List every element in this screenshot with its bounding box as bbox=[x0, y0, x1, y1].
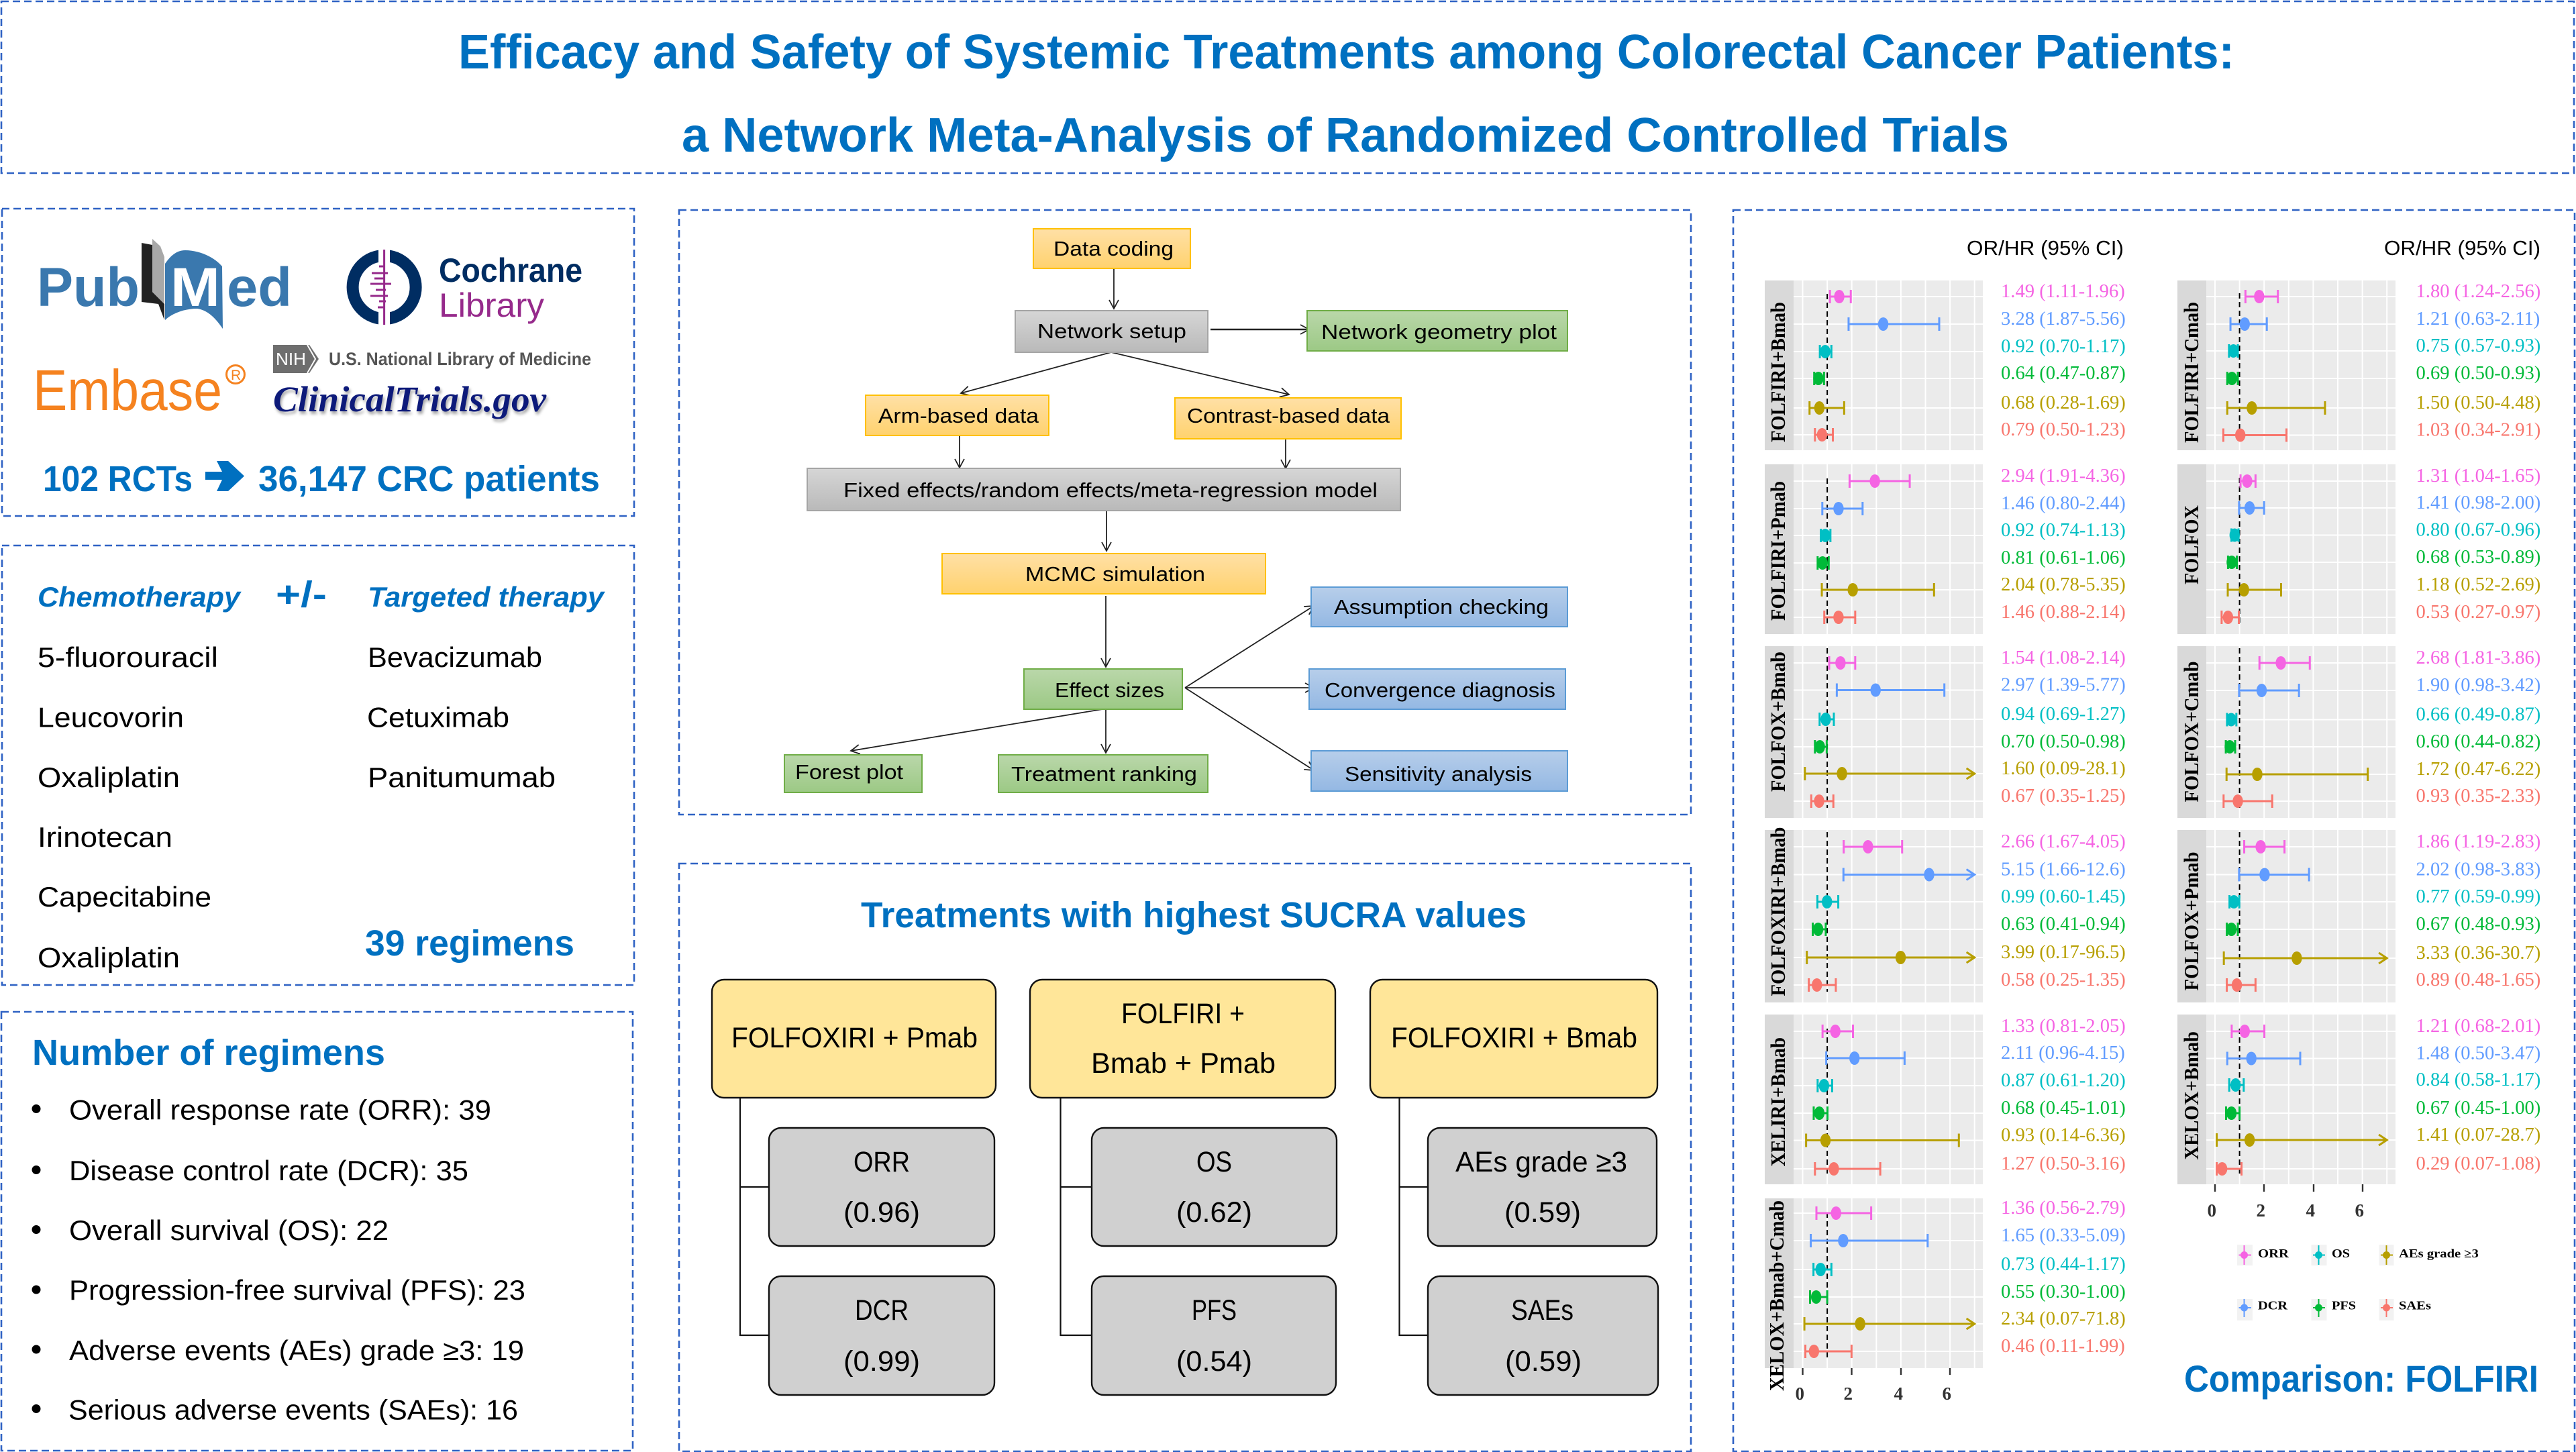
values: FOLFOX+Cmab: 0.60 (0.44-0.82) bbox=[2416, 731, 2540, 752]
values: XELIRI+Bmab: 0.93 (0.14-6.36) bbox=[2001, 1125, 2126, 1146]
box: OS: OS bbox=[1196, 1146, 1232, 1178]
box: MCMC simulation bbox=[942, 554, 1266, 594]
axis: left column: 6 bbox=[1942, 1384, 1951, 1404]
box: ORR: ORR bbox=[854, 1146, 910, 1178]
chart: XELOX+Bmab bbox=[2206, 1015, 2395, 1184]
axis: right column: 0 bbox=[2208, 1200, 2216, 1221]
values: XELOX+Bmab: 0.67 (0.45-1.00) bbox=[2416, 1098, 2540, 1119]
box: sensitivity analysis bbox=[1311, 751, 1567, 791]
forest panel: FOLFOX bbox=[2177, 464, 2540, 634]
axis: left column: 0 bbox=[1796, 1384, 1804, 1404]
forest panel: FOLFOXIRI+Bmab bbox=[1765, 827, 2126, 1002]
values: FOLFOX+Bmab: 1.60 (0.09-28.1) bbox=[2001, 758, 2126, 779]
list: regimen counts bbox=[32, 1094, 525, 1425]
forest panel: XELOX+Bmab bbox=[2177, 1015, 2540, 1221]
values: XELOX+Bmab+Cmab: 0.55 (0.30-1.00) bbox=[2001, 1282, 2126, 1302]
column header: right: OR/HR (95% CI) bbox=[2384, 236, 2540, 260]
values: FOLFIRI+Cmab: 0.69 (0.50-0.93) bbox=[2416, 363, 2540, 384]
logo: PubMed: Pub bbox=[37, 257, 140, 318]
title bbox=[1, 1, 2574, 173]
box: assumption checking: Assumption checking bbox=[1334, 595, 1549, 619]
list: regimen counts: Disease control rate (DCR): 35 bbox=[69, 1155, 468, 1186]
values: FOLFIRI+Pmab: 0.81 (0.61-1.06) bbox=[2001, 548, 2126, 568]
forest panel: FOLFIRI+Bmab: FOLFIRI+Bmab bbox=[1766, 302, 1790, 442]
chart: FOLFOX bbox=[2206, 464, 2395, 634]
box: SAEs: SAEs bbox=[1511, 1294, 1574, 1327]
values: FOLFOX+Cmab: 2.68 (1.81-3.86) bbox=[2416, 647, 2540, 668]
values: XELOX+Bmab: 1.21 (0.68-2.01) bbox=[2416, 1016, 2540, 1037]
box: arm-based data bbox=[866, 395, 1049, 435]
text: 102 RCTs: 102 RCTs bbox=[43, 459, 193, 499]
chart: FOLFIRI+Pmab bbox=[1794, 464, 1983, 634]
logo: Cochrane Library: Cochrane bbox=[439, 252, 582, 289]
list: targeted drugs: Panitumumab bbox=[368, 762, 556, 793]
box: AEs grade 3: AEs grade ≥3 bbox=[1455, 1146, 1627, 1178]
forest panel: XELIRI+Bmab: XELIRI+Bmab bbox=[1766, 1037, 1790, 1166]
values: FOLFOX+Cmab: 0.66 (0.49-0.87) bbox=[2416, 705, 2540, 725]
list: regimen counts: Adverse events (AEs) grade ≥3: 19 bbox=[69, 1335, 524, 1366]
values: FOLFIRI+Cmab: 1.21 (0.63-2.11) bbox=[2416, 309, 2540, 329]
box: convergence diagnosis: Convergence diagnosis bbox=[1325, 678, 1555, 702]
box: network setup bbox=[1015, 311, 1208, 352]
legend item: ORR: ORR bbox=[2258, 1247, 2289, 1260]
forest panel: FOLFIRI+Cmab: FOLFIRI+Cmab bbox=[2179, 302, 2203, 443]
values: FOLFIRI+Bmab: 3.28 (1.87-5.56) bbox=[2001, 309, 2126, 329]
box: PFS: PFS bbox=[1192, 1294, 1237, 1327]
forest panel: FOLFOXIRI+Bmab: FOLFOXIRI+Bmab bbox=[1766, 827, 1790, 996]
axis: right column: 4 bbox=[2306, 1200, 2315, 1221]
box: PFS bbox=[1092, 1276, 1336, 1395]
text: Comparison FOLFIRI: Comparison: FOLFIRI bbox=[2184, 1357, 2538, 1400]
box: network setup: Network setup bbox=[1037, 319, 1186, 343]
forest panel: FOLFOX+Pmab: FOLFOX+Pmab bbox=[2179, 852, 2203, 990]
box: FOLFOXIRI + Bmab bbox=[1370, 980, 1657, 1098]
box: ORR: (0.96) bbox=[843, 1196, 920, 1229]
axis: left column bbox=[1796, 1368, 1951, 1404]
logo: NIH U.S. National Library of Medicine: NIH bbox=[276, 349, 306, 369]
chart: FOLFIRI+Cmab bbox=[2206, 280, 2395, 450]
box: data coding: Data coding bbox=[1053, 237, 1174, 260]
connectors: tree lines bbox=[740, 1098, 1428, 1335]
title: Efficacy and Safety of Systemic Treatments among Colorectal Cancer Patients: bbox=[458, 25, 2234, 79]
values: FOLFOX+Bmab: 0.94 (0.69-1.27) bbox=[2001, 704, 2126, 725]
box: ORR bbox=[769, 1128, 994, 1246]
forest panel: FOLFOX: FOLFOX bbox=[2179, 505, 2203, 584]
values: XELIRI+Bmab: 0.87 (0.61-1.20) bbox=[2001, 1070, 2126, 1091]
heading: number of regimens: Number of regimens bbox=[32, 1033, 385, 1073]
list: chemotherapy drugs: Oxaliplatin bbox=[38, 942, 180, 973]
legend bbox=[2237, 1245, 2479, 1320]
values: FOLFOX bbox=[2416, 466, 2540, 623]
values: XELOX+Bmab+Cmab bbox=[2001, 1198, 2126, 1357]
values: FOLFOX+Cmab bbox=[2416, 647, 2540, 807]
legend item: DCR bbox=[2237, 1299, 2288, 1320]
box: SAEs bbox=[1428, 1276, 1658, 1395]
values: XELIRI+Bmab: 0.68 (0.45-1.01) bbox=[2001, 1098, 2126, 1119]
values: FOLFIRI+Cmab bbox=[2416, 281, 2540, 440]
box: convergence diagnosis bbox=[1309, 669, 1565, 709]
values: FOLFOX+Pmab bbox=[2416, 831, 2540, 990]
box: DCR bbox=[769, 1276, 994, 1395]
box: network geometry plot bbox=[1307, 311, 1567, 351]
values: XELIRI+Bmab: 1.33 (0.81-2.05) bbox=[2001, 1016, 2126, 1037]
values: FOLFIRI+Pmab: 2.94 (1.91-4.36) bbox=[2001, 466, 2126, 486]
legend item: PFS bbox=[2311, 1299, 2356, 1320]
values: FOLFIRI+Bmab: 0.79 (0.50-1.23) bbox=[2001, 419, 2126, 440]
values: FOLFIRI+Pmab: 0.92 (0.74-1.13) bbox=[2001, 520, 2126, 541]
values: FOLFOXIRI+Bmab: 5.15 (1.66-12.6) bbox=[2001, 859, 2126, 880]
box: DCR: DCR bbox=[855, 1294, 909, 1327]
values: FOLFIRI+Cmab: 1.80 (1.24-2.56) bbox=[2416, 281, 2540, 302]
box: FOLFOXIRI + Bmab: FOLFOXIRI + Bmab bbox=[1391, 1022, 1637, 1054]
forest panel: FOLFOX+Bmab bbox=[1765, 646, 2126, 818]
values: XELOX+Bmab: 1.41 (0.07-28.7) bbox=[2416, 1125, 2540, 1145]
values: FOLFOXIRI+Bmab: 0.63 (0.41-0.94) bbox=[2001, 914, 2126, 935]
forest panel: FOLFIRI+Pmab: FOLFIRI+Pmab bbox=[1766, 481, 1790, 621]
column header: left: OR/HR (95% CI) bbox=[1967, 236, 2124, 260]
values: FOLFOX+Bmab: 0.67 (0.35-1.25) bbox=[2001, 786, 2126, 807]
values: FOLFOX+Cmab: 1.90 (0.98-3.42) bbox=[2416, 675, 2540, 696]
values: XELIRI+Bmab: 1.27 (0.50-3.16) bbox=[2001, 1153, 2126, 1174]
box: assumption checking bbox=[1311, 587, 1567, 627]
values: FOLFOX+Cmab: 1.72 (0.47-6.22) bbox=[2416, 759, 2540, 780]
logo: PubMed bbox=[37, 239, 292, 329]
values: FOLFIRI+Pmab bbox=[2001, 466, 2126, 623]
box: treatment ranking: Treatment ranking bbox=[1011, 762, 1197, 786]
list: targeted drugs: Cetuximab bbox=[367, 702, 509, 733]
values: FOLFIRI+Cmab: 1.50 (0.50-4.48) bbox=[2416, 393, 2540, 413]
values: XELOX+Bmab+Cmab: 2.34 (0.07-71.8) bbox=[2001, 1308, 2126, 1329]
chart: FOLFOXIRI+Bmab bbox=[1794, 830, 1983, 1002]
panel: highest SUCRA values bbox=[679, 864, 1691, 1451]
list: chemotherapy drugs: 5-fluorouracil bbox=[38, 641, 218, 673]
box: contrast-based data bbox=[1175, 398, 1401, 439]
values: XELOX+Bmab bbox=[2416, 1016, 2540, 1174]
values: FOLFOX+Cmab: 0.93 (0.35-2.33) bbox=[2416, 786, 2540, 807]
values: FOLFOX+Pmab: 0.67 (0.48-0.93) bbox=[2416, 914, 2540, 935]
logo: PubMed: ed bbox=[227, 257, 292, 318]
logo: ClinicalTrials.gov: ClinicalTrials.gov bbox=[273, 379, 547, 419]
values: FOLFOXIRI+Bmab: 0.99 (0.60-1.45) bbox=[2001, 886, 2126, 907]
panel: number of regimens bbox=[1, 1012, 633, 1451]
forest panel: XELOX+Bmab: XELOX+Bmab bbox=[2179, 1031, 2203, 1159]
values: FOLFOX: 1.18 (0.52-2.69) bbox=[2416, 574, 2540, 595]
values: FOLFOXIRI+Bmab: 3.99 (0.17-96.5) bbox=[2001, 942, 2126, 963]
logo: PubMed: M bbox=[170, 257, 220, 318]
legend item: DCR: DCR bbox=[2258, 1299, 2288, 1312]
panel: analysis flowchart bbox=[679, 210, 1691, 815]
values: FOLFOX+Bmab: 2.97 (1.39-5.77) bbox=[2001, 675, 2126, 695]
heading: plus/minus: +/- bbox=[276, 574, 327, 615]
box: forest plot: Forest plot bbox=[795, 760, 903, 784]
chart: FOLFIRI+Bmab bbox=[1794, 280, 1983, 450]
values: FOLFOX+Bmab: 0.70 (0.50-0.98) bbox=[2001, 731, 2126, 752]
box: data coding bbox=[1033, 229, 1190, 268]
list: regimen counts: Overall survival (OS): 22 bbox=[69, 1214, 389, 1246]
arrows: flowchart connectors bbox=[851, 268, 1314, 770]
heading: SUCRA: Treatments with highest SUCRA values bbox=[861, 895, 1527, 935]
values: FOLFOX+Bmab bbox=[2001, 647, 2126, 807]
forest panel: FOLFIRI+Cmab bbox=[2177, 280, 2540, 450]
arrow: RCTs to patients bbox=[205, 461, 244, 491]
box: AEs grade 3: (0.59) bbox=[1504, 1196, 1581, 1229]
legend item: AEs grade 3 bbox=[2379, 1245, 2479, 1265]
chart: FOLFOX+Cmab bbox=[2206, 646, 2395, 818]
values: FOLFOX: 0.53 (0.27-0.97) bbox=[2416, 602, 2540, 623]
box: FOLFIRI + Bmab + Pmab bbox=[1030, 980, 1335, 1098]
axis: right column: 2 bbox=[2256, 1200, 2265, 1221]
box: OS bbox=[1092, 1128, 1337, 1246]
forest panel: FOLFOX+Pmab bbox=[2177, 830, 2540, 1002]
forest panel: FOLFIRI+Bmab bbox=[1765, 280, 2126, 450]
values: XELIRI+Bmab: 2.11 (0.96-4.15) bbox=[2001, 1043, 2125, 1064]
values: FOLFOX+Bmab: 1.54 (1.08-2.14) bbox=[2001, 647, 2126, 668]
box: FOLFOXIRI + Pmab bbox=[712, 980, 996, 1098]
values: XELOX+Bmab+Cmab: 0.73 (0.44-1.17) bbox=[2001, 1254, 2126, 1275]
box: FOLFIRI + Bmab + Pmab: Bmab + Pmab bbox=[1091, 1047, 1276, 1080]
box: sensitivity analysis: Sensitivity analysis bbox=[1345, 762, 1532, 786]
list: chemotherapy drugs: Irinotecan bbox=[38, 821, 172, 853]
axis: left column: 2 bbox=[1844, 1384, 1853, 1404]
legend item: OS: OS bbox=[2332, 1247, 2350, 1260]
values: FOLFOX+Pmab: 1.86 (1.19-2.83) bbox=[2416, 831, 2540, 852]
box: effect sizes bbox=[1024, 669, 1182, 709]
values: FOLFIRI+Bmab: 0.92 (0.70-1.17) bbox=[2001, 336, 2126, 357]
logo: Cochrane Library bbox=[353, 248, 582, 326]
box: contrast-based data: Contrast-based data bbox=[1187, 404, 1390, 427]
chart: XELOX+Bmab+Cmab bbox=[1794, 1198, 1983, 1368]
logo: Cochrane Library: Library bbox=[439, 287, 544, 324]
values: XELOX+Bmab+Cmab: 1.36 (0.56-2.79) bbox=[2001, 1198, 2126, 1218]
values: FOLFIRI+Bmab: 0.64 (0.47-0.87) bbox=[2001, 363, 2126, 384]
panel: forest plots comparison with FOLFIRI bbox=[1733, 210, 2575, 1451]
values: FOLFIRI+Bmab: 1.49 (1.11-1.96) bbox=[2001, 281, 2125, 302]
list: targeted drugs bbox=[367, 641, 556, 793]
box: model bbox=[807, 468, 1400, 511]
values: XELIRI+Bmab bbox=[2001, 1016, 2126, 1174]
values: FOLFOX+Pmab: 2.02 (0.98-3.83) bbox=[2416, 859, 2540, 880]
forest panel: XELOX+Bmab+Cmab: XELOX+Bmab+Cmab bbox=[1765, 1200, 1788, 1391]
box: effect sizes: Effect sizes bbox=[1055, 678, 1164, 702]
values: FOLFIRI+Bmab: 0.68 (0.28-1.69) bbox=[2001, 393, 2126, 413]
box: network geometry plot: Network geometry plot bbox=[1321, 320, 1557, 344]
values: FOLFIRI+Pmab: 1.46 (0.80-2.44) bbox=[2001, 493, 2126, 514]
list: chemotherapy drugs: Leucovorin bbox=[38, 702, 184, 733]
list: chemotherapy drugs: Oxaliplatin bbox=[38, 762, 180, 793]
values: FOLFOXIRI+Bmab bbox=[2001, 831, 2126, 990]
axis: left column: 4 bbox=[1894, 1384, 1903, 1404]
logo: Embase: R bbox=[231, 368, 241, 383]
logo: Embase: Embase bbox=[33, 359, 222, 423]
list: chemotherapy drugs: Capecitabine bbox=[38, 881, 211, 913]
legend item: PFS: PFS bbox=[2332, 1299, 2356, 1312]
values: FOLFOX+Pmab: 3.33 (0.36-30.7) bbox=[2416, 943, 2540, 964]
box: arm-based data: Arm-based data bbox=[878, 404, 1039, 427]
box: treatment ranking bbox=[998, 755, 1208, 792]
box: FOLFIRI + Bmab + Pmab: FOLFIRI + bbox=[1121, 998, 1245, 1030]
values: FOLFOXIRI+Bmab: 2.66 (1.67-4.05) bbox=[2001, 831, 2126, 852]
legend item: OS bbox=[2311, 1245, 2350, 1265]
forest panel: XELIRI+Bmab bbox=[1765, 1015, 2126, 1184]
forest panel: FOLFIRI+Pmab bbox=[1765, 464, 2126, 634]
list: targeted drugs: Bevacizumab bbox=[368, 641, 542, 673]
values: FOLFOXIRI+Bmab: 0.58 (0.25-1.35) bbox=[2001, 970, 2126, 990]
values: XELOX+Bmab: 0.29 (0.07-1.08) bbox=[2416, 1153, 2540, 1174]
box: forest plot bbox=[784, 755, 922, 792]
values: FOLFIRI+Pmab: 1.46 (0.88-2.14) bbox=[2001, 602, 2126, 623]
values: FOLFOX: 1.31 (1.04-1.65) bbox=[2416, 466, 2540, 486]
box: DCR: (0.99) bbox=[843, 1345, 920, 1378]
box: SAEs: (0.59) bbox=[1505, 1345, 1582, 1378]
values: XELOX+Bmab: 0.84 (0.58-1.17) bbox=[2416, 1070, 2540, 1090]
legend item: SAEs: SAEs bbox=[2399, 1299, 2431, 1312]
box: MCMC simulation: MCMC simulation bbox=[1025, 562, 1205, 586]
values: FOLFOX: 0.80 (0.67-0.96) bbox=[2416, 519, 2540, 541]
logo: NIH U.S. National Library of Medicine bbox=[273, 345, 591, 373]
values: XELOX+Bmab: 1.48 (0.50-3.47) bbox=[2416, 1043, 2540, 1064]
values: FOLFIRI+Bmab bbox=[2001, 281, 2126, 440]
values: FOLFOX: 0.68 (0.53-0.89) bbox=[2416, 547, 2540, 568]
chart: FOLFOX+Bmab bbox=[1794, 646, 1983, 818]
box: PFS: (0.54) bbox=[1176, 1345, 1252, 1378]
box: FOLFOXIRI + Pmab: FOLFOXIRI + Pmab bbox=[731, 1022, 978, 1054]
list: chemotherapy drugs bbox=[38, 641, 218, 973]
forest panel: XELOX+Bmab+Cmab bbox=[1765, 1198, 2126, 1404]
forest panel: FOLFOX+Cmab bbox=[2177, 646, 2540, 818]
heading: chemotherapy: Chemotherapy bbox=[38, 581, 242, 613]
axis: right column: 6 bbox=[2355, 1200, 2364, 1221]
panel: data sources bbox=[2, 209, 634, 516]
forest panel: FOLFOX+Bmab: FOLFOX+Bmab bbox=[1766, 652, 1790, 792]
heading: targeted therapy: Targeted therapy bbox=[368, 581, 606, 613]
forest panel: FOLFOX+Cmab: FOLFOX+Cmab bbox=[2179, 662, 2203, 802]
axis: right column bbox=[2208, 1184, 2364, 1221]
list: regimen counts: Overall response rate (ORR): 39 bbox=[69, 1094, 491, 1126]
box: AEs grade 3 bbox=[1428, 1128, 1657, 1246]
title: a Network Meta-Analysis of Randomized Controlled Trials bbox=[682, 109, 2009, 162]
text: 39 regimens: 39 regimens bbox=[365, 923, 574, 964]
values: FOLFOX: 1.41 (0.98-2.00) bbox=[2416, 492, 2540, 513]
text: 36,147 CRC patients: 36,147 CRC patients bbox=[258, 459, 600, 499]
logo: NIH U.S. National Library of Medicine: U.S. National Library of Medicine bbox=[329, 349, 591, 369]
values: FOLFOX+Pmab: 0.77 (0.59-0.99) bbox=[2416, 886, 2540, 907]
values: FOLFIRI+Pmab: 2.04 (0.78-5.35) bbox=[2001, 574, 2126, 595]
chart: XELIRI+Bmab bbox=[1794, 1015, 1983, 1184]
legend item: AEs grade 3: AEs grade ≥3 bbox=[2399, 1247, 2479, 1260]
panel: treatments bbox=[2, 546, 634, 985]
box: model: Fixed effects/random effects/meta-regression model bbox=[843, 478, 1378, 502]
values: XELOX+Bmab+Cmab: 0.46 (0.11-1.99) bbox=[2001, 1336, 2125, 1357]
legend item: ORR bbox=[2237, 1245, 2289, 1265]
list: regimen counts: Progression-free survival (PFS): 23 bbox=[69, 1274, 525, 1306]
values: FOLFOX+Pmab: 0.89 (0.48-1.65) bbox=[2416, 970, 2540, 990]
values: FOLFIRI+Cmab: 1.03 (0.34-2.91) bbox=[2416, 420, 2540, 440]
values: XELOX+Bmab+Cmab: 1.65 (0.33-5.09) bbox=[2001, 1225, 2126, 1246]
list: regimen counts: Serious adverse events (SAEs): 16 bbox=[68, 1394, 518, 1425]
chart: FOLFOX+Pmab bbox=[2206, 830, 2395, 1002]
values: FOLFIRI+Cmab: 0.75 (0.57-0.93) bbox=[2416, 335, 2540, 356]
legend item: SAEs bbox=[2379, 1299, 2431, 1320]
box: OS: (0.62) bbox=[1176, 1196, 1252, 1229]
